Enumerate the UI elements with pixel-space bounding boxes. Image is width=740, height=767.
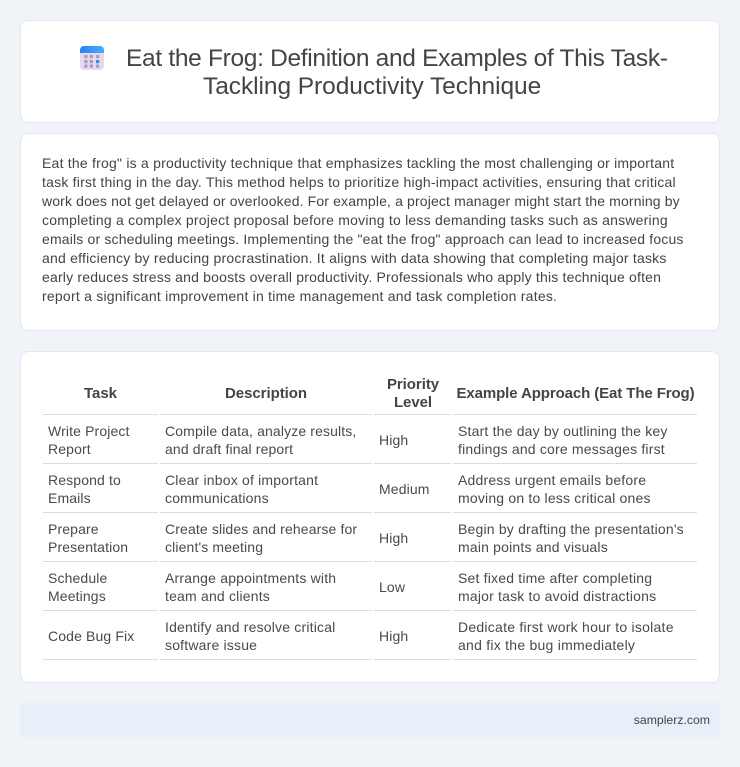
- title: Tackling Productivity Technique: [203, 73, 541, 100]
- table header: Example Approach (Eat The Frog): [456, 385, 695, 402]
- icon: calendar: [80, 46, 104, 70]
- panel: introduction text: [20, 133, 720, 331]
- row: respond to emails: communications: [165, 490, 269, 506]
- row: schedule meetings: Set fixed time after completing: [458, 570, 652, 586]
- row: prepare presentation: Begin by drafting the presentation's: [458, 521, 684, 537]
- row: write project report: and draft final report: [165, 441, 293, 457]
- text block: definition: task first thing in the day. This method helps to prioritize high-impact activities, ensuring that critical: [42, 174, 676, 190]
- row: respond to emails: Medium: [379, 481, 430, 497]
- row: write project report: Write Project: [48, 423, 130, 439]
- row: write project report: High: [379, 432, 408, 448]
- row: code bug fix: Identify and resolve critical: [165, 619, 335, 635]
- title: Eat the Frog: Definition and Examples of This Task-: [126, 45, 668, 72]
- table header: Priority: [387, 376, 439, 393]
- row: code bug fix: and fix the bug immediately: [458, 637, 635, 653]
- panel: title card: [20, 20, 720, 123]
- row: write project report: Report: [48, 441, 91, 457]
- row: respond to emails: Address urgent emails before: [458, 472, 646, 488]
- row: code bug fix: Dedicate first work hour to isolate: [458, 619, 674, 635]
- row: prepare presentation: High: [379, 530, 408, 546]
- row: code bug fix: High: [379, 628, 408, 644]
- row: write project report: Compile data, analyze results,: [165, 423, 356, 439]
- row: prepare presentation: main points and visuals: [458, 539, 608, 555]
- text block: definition: work does not get delayed or overlooked. For example, a project manager might start the morning by: [42, 193, 680, 209]
- row: schedule meetings: Arrange appointments with: [165, 570, 336, 586]
- table header: Task: [84, 385, 117, 402]
- row: prepare presentation: Presentation: [48, 539, 128, 555]
- row: code bug fix: [48, 619, 674, 653]
- row: prepare presentation: Create slides and rehearse for: [165, 521, 357, 537]
- row: respond to emails: moving on to less critical ones: [458, 490, 651, 506]
- row: write project report: [48, 423, 668, 457]
- table header: Description: [225, 385, 307, 402]
- row: write project report: Start the day by outlining the key: [458, 423, 668, 439]
- text block: definition: [42, 155, 684, 304]
- row: schedule meetings: major task to avoid distractions: [458, 588, 656, 604]
- footer bar: [20, 703, 720, 737]
- row: respond to emails: [48, 472, 651, 506]
- text block: definition: completing a complex project proposal before moving to less demanding tasks such as answering: [42, 212, 668, 228]
- table header: Level: [394, 394, 432, 411]
- panel: task table: [20, 351, 720, 683]
- table header: [84, 376, 695, 411]
- text block: definition: emails or scheduling meetings. Implementing the "eat the frog" approach can lead to increased focus: [42, 231, 684, 247]
- text block: definition: Eat the frog" is a productivity technique that emphasizes tackling the most challenging or important: [42, 155, 674, 171]
- row: schedule meetings: Meetings: [48, 588, 106, 604]
- row: schedule meetings: [48, 570, 656, 604]
- text block: definition: early reduces stress and boosts overall productivity. Professionals who apply this technique often: [42, 269, 661, 285]
- row: code bug fix: software issue: [165, 637, 257, 653]
- row: prepare presentation: [48, 521, 684, 555]
- row: schedule meetings: Schedule: [48, 570, 107, 586]
- row: respond to emails: Respond to: [48, 472, 121, 488]
- text block: definition: report a significant improvement in time management and task completion rates.: [42, 288, 557, 304]
- title: [126, 45, 668, 100]
- table rules: [43, 414, 697, 660]
- row: schedule meetings: Low: [379, 579, 405, 595]
- row: respond to emails: Emails: [48, 490, 91, 506]
- row: write project report: findings and core messages first: [458, 441, 665, 457]
- text block: definition: and efficiency by reducing procrastination. It aligns with data showing that completing major tasks: [42, 250, 667, 266]
- row: prepare presentation: Prepare: [48, 521, 99, 537]
- row: code bug fix: Code Bug Fix: [48, 628, 134, 644]
- row: respond to emails: Clear inbox of important: [165, 472, 318, 488]
- row: schedule meetings: team and clients: [165, 588, 270, 604]
- footer text: samplerz.com: [634, 713, 710, 727]
- row: prepare presentation: client's meeting: [165, 539, 263, 555]
